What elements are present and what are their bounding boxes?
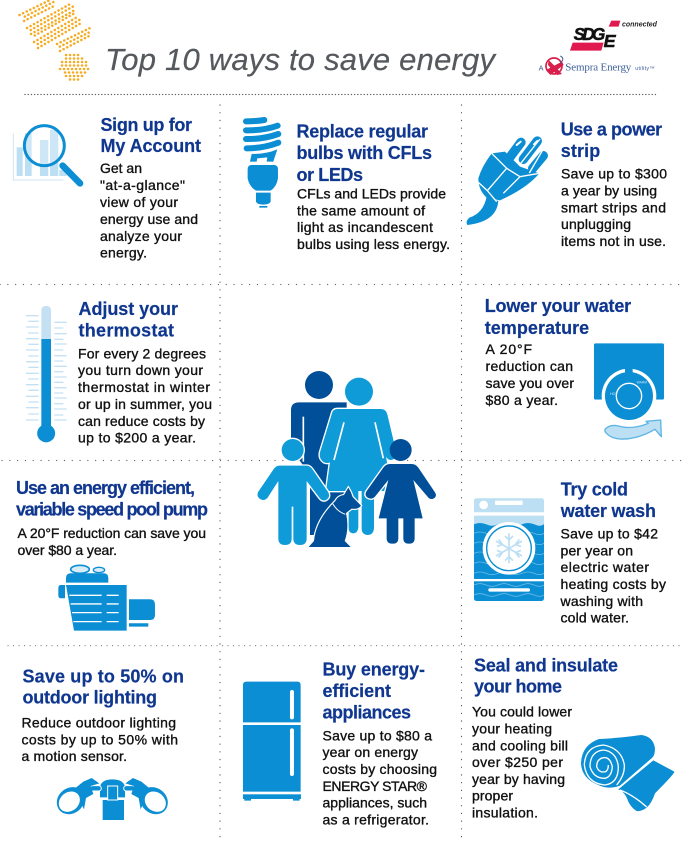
logo: SDGE connected, a Sempra Energy utility: E: [604, 31, 617, 51]
heading: strip: [561, 141, 600, 161]
heading: [474, 655, 618, 697]
text block: [78, 345, 212, 446]
heading: [100, 115, 201, 156]
heading: thermostat: [78, 321, 174, 341]
text block: view of your: [100, 194, 178, 210]
figure: girl: [366, 439, 436, 544]
heading: [560, 480, 656, 521]
text block: A 20°F: [486, 341, 532, 357]
icon: dotted orange light bulb logo: [20, 0, 91, 80]
text block: Reduce outdoor lighting: [22, 715, 176, 731]
text block: analyze your: [100, 228, 182, 244]
text block: smart strips and: [561, 199, 666, 215]
panel: power strip: [467, 120, 667, 249]
heading: appliances: [322, 702, 411, 722]
logo: SDGE connected, a Sempra Energy utility: [539, 21, 658, 75]
heading: Sign up for: [100, 115, 192, 135]
logo: SDGE connected, a Sempra Energy utility: A: [539, 64, 544, 73]
title: Top 10 ways to save energy: [105, 42, 498, 77]
text block: Save up to $42: [560, 526, 658, 542]
text block: "at-a-glance": [100, 177, 185, 193]
heading: Seal and insulate: [474, 655, 618, 675]
logo: SDGE connected, a Sempra Energy utility: Sempra Energy: [565, 61, 632, 73]
text block: the same amount of: [297, 202, 425, 218]
icon: refrigerator: [243, 682, 301, 801]
text block: per year on: [560, 542, 633, 558]
panel: thermostat: [26, 299, 212, 446]
text block: light as incandescent: [297, 219, 433, 235]
heading: your home: [474, 677, 562, 697]
illustration: family with dog: [257, 371, 436, 547]
panel: replace bulbs: [246, 120, 450, 252]
text block: You could lower: [472, 704, 572, 720]
icon: washing machine with snowflake: [474, 498, 544, 601]
text block: year by having: [472, 771, 565, 787]
text block: bulbs using less energy.: [297, 236, 450, 252]
heading: Use an energy efficient,: [16, 478, 195, 498]
logo: SDGE connected, a Sempra Energy utility: SDG: [574, 24, 605, 44]
text block: or up in summer, you: [78, 396, 212, 412]
text block: unplugging: [561, 216, 631, 232]
text block: [297, 186, 450, 252]
text block: your heating: [472, 720, 552, 736]
text block: [22, 715, 178, 764]
icon: water heater dial: WARM: [637, 380, 647, 384]
heading: bulbs with CFLs: [296, 143, 432, 163]
text block: [486, 341, 574, 408]
text block: reduction can: [486, 358, 573, 374]
heading: [22, 666, 184, 708]
text block: you turn down your: [78, 362, 203, 378]
text block: [18, 525, 206, 558]
text block: year on energy: [322, 744, 418, 760]
text block: electric water: [560, 559, 649, 575]
heading: [485, 296, 631, 338]
heading: [16, 478, 208, 520]
text block: Save up to $80 a: [322, 727, 432, 743]
icon: magnifier over bar chart: [13, 126, 80, 183]
figure: boy: [257, 439, 329, 545]
text block: a motion sensor.: [22, 748, 127, 764]
text block: cold water.: [560, 610, 629, 626]
text block: insulation.: [472, 804, 538, 820]
text block: washing with: [560, 593, 643, 609]
heading: Try cold: [561, 480, 628, 500]
panel: energy-efficient appliances: [243, 659, 437, 828]
text block: proper: [472, 788, 513, 804]
figure: woman: [320, 378, 396, 535]
icon: electric plug: [467, 139, 543, 225]
heading: My Account: [100, 136, 201, 156]
text block: $80 a year.: [486, 392, 558, 408]
text block: [560, 526, 666, 626]
heading: outdoor lighting: [22, 688, 157, 708]
text block: A 20°F reduction can save you: [18, 525, 206, 541]
text block: up to $200 a year.: [78, 430, 196, 446]
text block: Save up to $300: [561, 166, 667, 182]
text block: [472, 704, 572, 820]
icon: rolled insulation: [581, 735, 674, 811]
logo: SDGE connected, a Sempra Energy utility: utility™: [635, 66, 655, 72]
text block: energy.: [100, 244, 147, 260]
text block: over $80 a year.: [18, 542, 117, 558]
heading: Adjust your: [78, 299, 178, 319]
panel: cold water wash: [474, 480, 666, 626]
icon: water heater dial: HOT: [610, 392, 618, 396]
heading: [296, 122, 432, 185]
text block: save you over: [486, 375, 574, 391]
text block: energy use and: [100, 211, 198, 227]
text block: thermostat in winter: [78, 379, 210, 395]
heading: [322, 659, 425, 722]
text block: [100, 160, 198, 260]
text block: can reduce costs by: [78, 413, 205, 429]
heading: or LEDs: [296, 165, 363, 185]
text block: [322, 727, 437, 828]
panel: pool pump: [16, 478, 208, 631]
heading: Use a power: [561, 120, 662, 140]
icon: pool pump: [58, 565, 155, 631]
icon: water heater dial: [594, 343, 664, 439]
panel: sign up for my account: [13, 115, 201, 260]
icon: motion sensor flood lights: [51, 778, 173, 820]
text block: appliances, such: [322, 794, 427, 810]
panel: seal and insulate: [472, 655, 674, 820]
text block: items not in use.: [561, 233, 666, 249]
text block: For every 2 degrees: [78, 345, 206, 361]
icon: thermometer: [26, 306, 67, 442]
text block: Get an: [100, 160, 142, 176]
text block: a year by using: [561, 182, 657, 198]
text block: and cooling bill: [472, 737, 568, 753]
heading: efficient: [322, 681, 391, 701]
heading: [78, 299, 178, 341]
heading: Replace regular: [296, 122, 428, 142]
text block: heating costs by: [560, 576, 666, 592]
heading: Save up to 50% on: [22, 666, 184, 686]
heading: Lower your water: [485, 296, 631, 316]
panel: water temperature: [485, 296, 664, 439]
figure: dog: [309, 488, 361, 547]
text block: over $250 per: [472, 754, 563, 770]
logo: SDGE connected, a Sempra Energy utility: connected: [622, 21, 658, 28]
heading: [561, 120, 662, 161]
heading: temperature: [485, 318, 589, 338]
icon: CFL bulb: [246, 120, 278, 208]
panel: outdoor lighting: [22, 666, 184, 820]
heading: Buy energy-: [322, 659, 425, 679]
text block: costs by up to 50% with: [22, 732, 178, 748]
text block: costs by choosing: [322, 761, 437, 777]
text block: [561, 166, 667, 249]
heading: water wash: [560, 501, 656, 521]
heading: variable speed pool pump: [16, 500, 208, 520]
text block: as a refrigerator.: [322, 812, 429, 828]
text block: ENERGY STAR®: [322, 778, 428, 794]
text block: CFLs and LEDs provide: [297, 186, 446, 202]
figure: man: [291, 371, 347, 535]
